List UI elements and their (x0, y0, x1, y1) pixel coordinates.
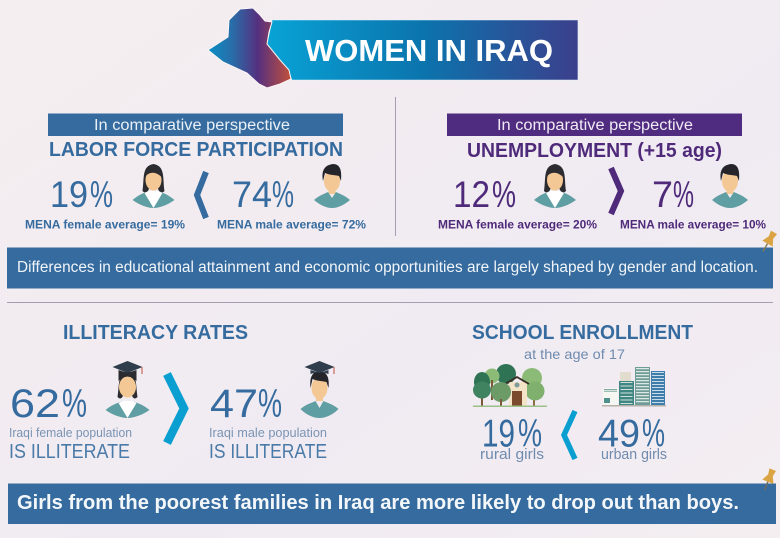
stat: female unemployment: 12 (453, 174, 490, 215)
callout: girls dropping out (8, 467, 778, 524)
caption: MENA female: MENA female average= 20% (438, 218, 597, 232)
stat: female labor force: 19 (50, 174, 88, 215)
caption: Iraqi female population: Iraqi female population (9, 426, 132, 440)
callout: educational attainment: Differences in educational attainment and economic opportunities are largely shaped by gender and location. (17, 259, 758, 276)
caption: Iraqi male population (209, 426, 327, 463)
title banner: WOMEN IN IRAQ (305, 33, 553, 68)
stat: female unemployment: % (492, 174, 516, 215)
stat: urban girls: % (642, 412, 665, 456)
comparison chevron (611, 168, 621, 214)
stat: rural girls: 19 (482, 412, 515, 456)
callout: girls dropping out: Girls from the poorest families in Iraq are more likely to drop out than boys. (17, 492, 739, 514)
icon: woman (534, 164, 576, 208)
panel: school enrollment (472, 322, 693, 463)
heading bar (48, 114, 343, 136)
title banner (208, 8, 578, 88)
icon: rural house and trees (473, 364, 547, 407)
stat: rural girls (480, 412, 544, 463)
stat: urban girls: 49 (598, 412, 640, 456)
icon: map of Iraq (208, 8, 291, 88)
comparison chevron (167, 374, 184, 443)
stat: female illiteracy: 62 (10, 382, 60, 426)
icon: city buildings (602, 367, 666, 406)
comparison chevron (564, 411, 575, 459)
stat: male illiteracy: 47 (210, 382, 258, 426)
comparison chevron (197, 172, 206, 218)
heading: ILLITERACY RATES (63, 322, 248, 344)
panel: unemployment (438, 114, 766, 232)
stat: male labor force: % (272, 174, 294, 215)
stat: female labor force: % (90, 174, 113, 215)
subheading: at the age of 17 (524, 346, 625, 362)
heading: UNEMPLOYMENT (+15 age) (467, 140, 722, 162)
heading: LABOR FORCE PARTICIPATION (49, 139, 343, 161)
caption: MENA male: MENA male average= 10% (620, 218, 766, 232)
caption: Iraqi male population: IS ILLITERATE (209, 441, 327, 463)
panel: labor force participation (25, 114, 366, 232)
stat: male illiteracy: % (258, 382, 282, 426)
caption: Iraqi female population: IS ILLITERATE (9, 441, 130, 463)
icon: woman (132, 164, 174, 208)
caption: MENA female: MENA female average= 19% (25, 218, 185, 232)
panel: illiteracy rates (9, 322, 338, 463)
caption: Iraqi male population: Iraqi male population (209, 426, 327, 440)
icon: graduate man (300, 361, 338, 418)
stat: male unemployment: 7 (652, 174, 673, 215)
stat: urban girls (598, 412, 667, 463)
heading bar (447, 114, 742, 136)
stat: rural girls: rural girls (480, 446, 544, 463)
icon: pin (759, 467, 778, 492)
callout: educational attainment (7, 229, 779, 288)
caption: MENA male: MENA male average= 72% (217, 218, 366, 232)
stat: urban girls: urban girls (601, 446, 667, 463)
stat: male unemployment: % (673, 174, 694, 215)
icon: pin (758, 229, 779, 254)
caption: Iraqi female population (9, 426, 132, 463)
icon: graduate woman (106, 361, 150, 418)
stat: rural girls: % (518, 412, 542, 456)
icon: man (314, 164, 350, 208)
heading bar: In comparative perspective (497, 117, 693, 134)
stat: male labor force: 74 (232, 174, 272, 215)
stat: female illiteracy: % (62, 382, 87, 426)
heading bar: In comparative perspective (94, 117, 290, 134)
icon: man (712, 164, 748, 208)
heading: SCHOOL ENROLLMENT (472, 322, 693, 344)
